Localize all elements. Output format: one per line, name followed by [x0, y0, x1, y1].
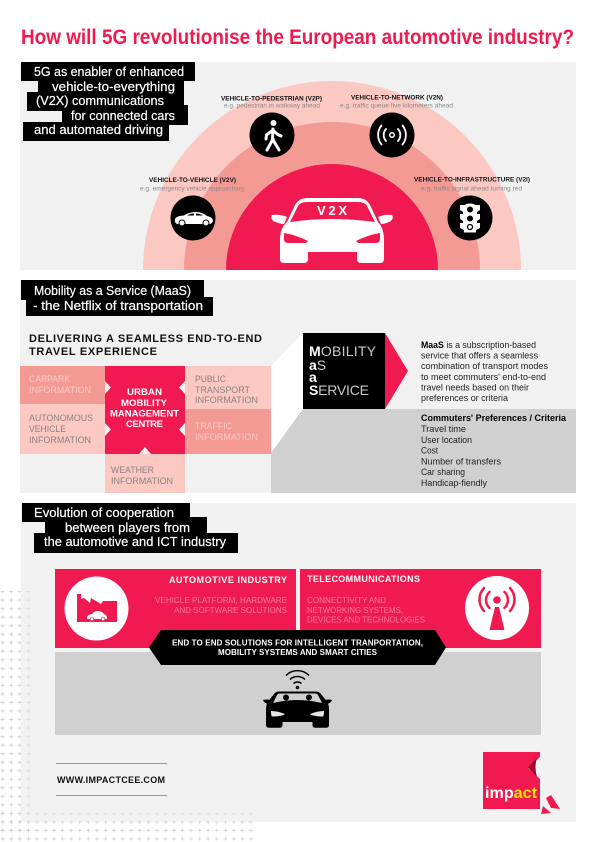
text: commuter criteria list: Car sharing [421, 467, 465, 477]
box: autonomous vehicle information: INFORMATION [29, 435, 91, 445]
text: MaaS description: service that offers a seamless [421, 350, 538, 360]
website link: WWW.IMPACTCEE.COM [57, 775, 165, 785]
box: public transport information: INFORMATION [195, 395, 258, 405]
label: V2N: VEHICLE-TO-NETWORK (V2N) [351, 94, 443, 102]
heading: MaaS: - the Netflix of transportation [33, 298, 203, 313]
box: grey base [55, 652, 541, 735]
icon: network signal [370, 112, 414, 158]
box: traffic information: INFORMATION [195, 432, 258, 442]
banner: end to end solutions [149, 630, 446, 665]
label: V2I: VEHICLE-TO-INFRASTRUCTURE (V2I) [414, 176, 530, 184]
arrow: red pointer [385, 333, 408, 409]
text: commuter criteria list: User location [421, 435, 472, 445]
subheading: seamless travel [29, 333, 262, 358]
icon: antenna [465, 576, 529, 640]
box: urban mobility management centre: MOBILITY [121, 398, 168, 409]
text: MaaS description: to meet commuters' end-to-end [421, 372, 546, 382]
box: telecommunications: TELECOMMUNICATIONS [307, 574, 420, 584]
box: carpark information: CARPARK [29, 374, 70, 384]
icon: pedestrian [250, 112, 294, 158]
box: Mobility as a Service [303, 333, 385, 409]
heading: 5G as enabler: and automated driving [34, 122, 163, 137]
website link [56, 764, 167, 796]
text: commuter criteria list: Number of transfers [421, 456, 501, 466]
label: V2I [414, 176, 530, 192]
label: V2P [221, 96, 322, 110]
box: carpark information [20, 366, 105, 404]
box: urban mobility management centre: URBAN [127, 387, 162, 398]
box: automotive industry: VEHICLE PLATFORM, HARDWARE [155, 595, 287, 605]
text: commuter criteria list: Commuters' Preferences / Criteria [421, 413, 567, 423]
heading: cooperation: between players from [65, 520, 190, 535]
box: weather information [105, 454, 185, 493]
heading: 5G as enabler: vehicle-to-everything [52, 79, 175, 94]
box: public transport information: PUBLIC [195, 374, 226, 384]
text: MaaS description: MaaS is a subscription-based [421, 340, 536, 350]
banner: end to end solutions: MOBILITY SYSTEMS AND SMART CITIES [218, 648, 378, 657]
subheading: seamless travel: DELIVERING A SEAMLESS END-TO-END [29, 333, 262, 345]
heading: cooperation: the automotive and ICT industry [44, 534, 226, 549]
foreground plus pattern over panel edge [0, 591, 255, 842]
box: traffic information [185, 409, 271, 454]
icon: connected car [263, 671, 332, 728]
subheading: seamless travel: TRAVEL EXPERIENCE [29, 346, 157, 358]
heading: MaaS: Mobility as a Service (MaaS) [34, 283, 191, 298]
background plus pattern [0, 591, 255, 842]
icon: factory [64, 576, 128, 640]
box: telecommunications: CONNECTIVITY AND [307, 595, 386, 605]
text: commuter criteria list: Cost [421, 446, 438, 456]
label: V2P: VEHICLE-TO-PEDESTRIAN (V2P) [221, 96, 322, 102]
box: urban mobility management centre: CENTRE [126, 419, 164, 430]
label: V2N [340, 94, 453, 110]
text: commuter criteria list: Handicap-fiendly [421, 478, 487, 488]
box: public transport information: TRANSPORT [195, 385, 250, 395]
text: MaaS description: combination of transport modes [421, 361, 548, 371]
box: traffic information: TRAFFIC [195, 421, 232, 431]
box: automotive industry [55, 569, 296, 648]
box: telecommunications: NETWORKING SYSTEMS, [307, 605, 403, 615]
box: telecommunications [300, 569, 541, 648]
text: commuter criteria list: Travel time [421, 424, 466, 434]
box: telecommunications: DEVICES AND TECHNOLOGIES [307, 614, 425, 624]
logo: impact [483, 752, 560, 814]
logo: impact: impact [485, 785, 538, 802]
connector shapes [271, 333, 576, 493]
box: public transport information [185, 366, 271, 409]
panel: Mobility as a Service [20, 280, 576, 493]
box: urban mobility management centre [105, 366, 185, 454]
box: automotive industry: AND SOFTWARE SOLUTIONS [174, 605, 287, 615]
text: MaaS description [421, 340, 548, 403]
box: weather information: WEATHER [111, 465, 154, 475]
concentric signal arcs [143, 81, 521, 270]
box: Mobility as a Service: aS [309, 357, 326, 373]
central car with V2X label [271, 198, 393, 263]
banner: end to end solutions: END TO END SOLUTIONS FOR INTELLIGENT TRANPORTATION, [172, 638, 423, 648]
label: V2N: e.g. traffic queue five kilometers ahead [340, 102, 453, 110]
box: Mobility as a Service: MOBILITY [309, 343, 377, 359]
text: commuter criteria list [421, 413, 567, 488]
box: autonomous vehicle information [20, 404, 105, 454]
heading: MaaS [21, 280, 213, 316]
heading: 5G as enabler [21, 62, 195, 141]
text: MaaS description: preferences or criteria [421, 393, 509, 403]
box: Mobility as a Service: a [309, 369, 317, 385]
label: V2V [140, 177, 244, 192]
heading: 5G as enabler: 5G as enabler of enhanced [34, 64, 184, 79]
label: V2V: VEHICLE-TO-VEHICLE (V2V) [149, 177, 236, 184]
central car with V2X label: V2X [317, 203, 347, 218]
box: automotive industry: AUTOMOTIVE INDUSTRY [169, 575, 287, 585]
heading: cooperation: Evolution of cooperation [34, 505, 174, 520]
panel: evolution of cooperation [21, 503, 576, 822]
panel: V2X communications [20, 62, 576, 270]
heading: 5G as enabler: for connected cars [71, 108, 175, 123]
box: urban mobility management centre: MANAGEMENT [110, 408, 179, 420]
text: MaaS description: travel needs based on their [421, 382, 529, 392]
box: autonomous vehicle information: AUTONOMOUS [29, 413, 93, 423]
icon: car side view [170, 196, 216, 240]
icon: traffic light [448, 196, 492, 240]
label: V2I: e.g. traffic signal ahead turning red [421, 186, 522, 192]
box: carpark information: INFORMATION [29, 385, 91, 395]
heading: cooperation [22, 503, 238, 553]
label: V2V: e.g. emergency vehicle approaching [140, 186, 244, 192]
box: weather information: INFORMATION [111, 476, 173, 486]
label: V2P: e.g. pedestrian in walkway ahead [224, 102, 320, 110]
heading: 5G as enabler: (V2X) communications [36, 93, 164, 108]
box: autonomous vehicle information: VEHICLE [29, 424, 66, 434]
box: Mobility as a Service: SERVICE [309, 382, 369, 398]
